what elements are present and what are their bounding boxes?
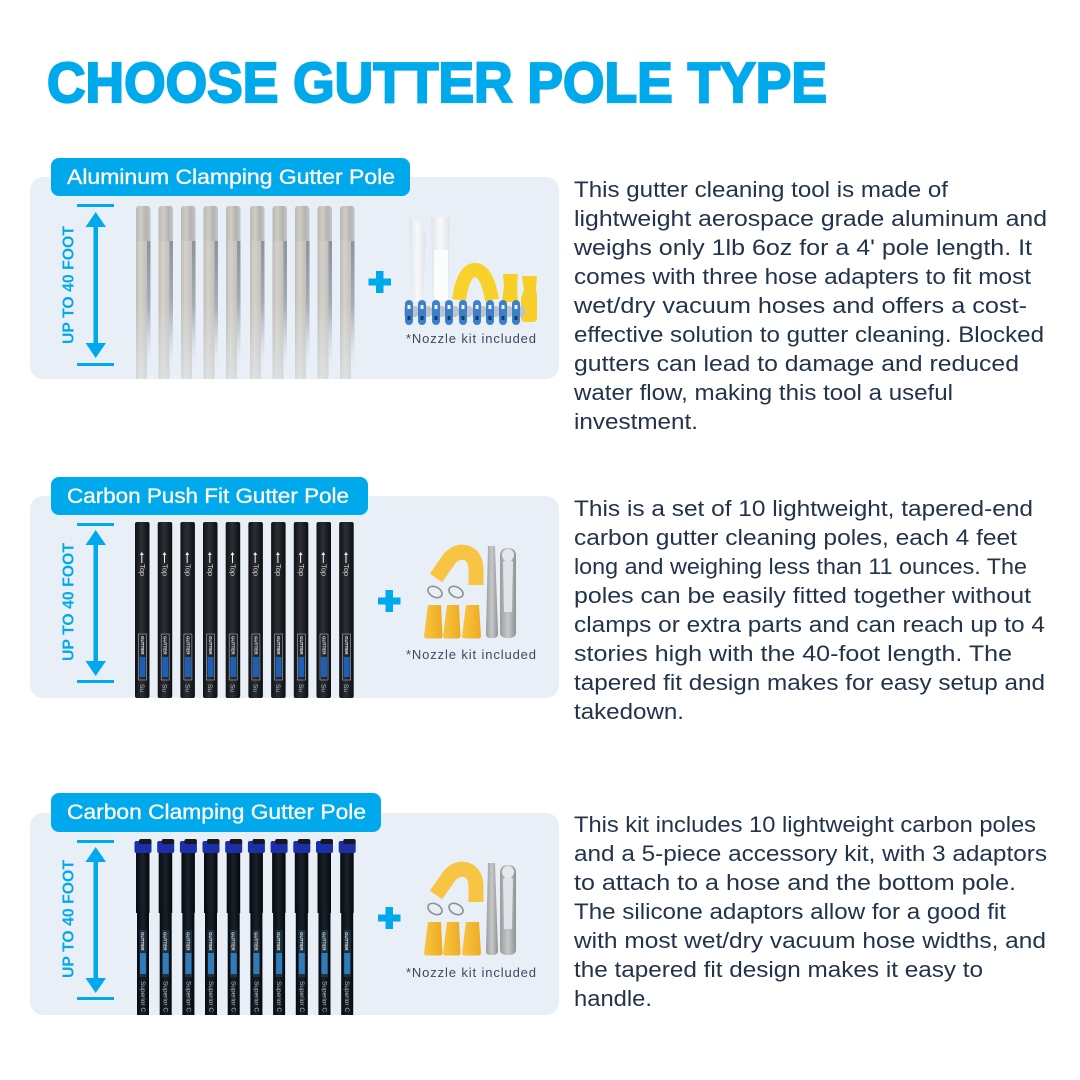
description: aluminum clamping gutter pole: lightweight aerospace grade aluminum and — [574, 206, 1047, 231]
description: carbon push fit gutter pole: This is a set of 10 lightweight, tapered-end — [574, 496, 1033, 521]
carbon push fit poles: GUTTER — [299, 636, 304, 655]
carbon clamping poles: Superior C — [320, 981, 328, 1012]
carbon clamping poles: GUTTER — [140, 932, 145, 951]
icon: plus — [378, 590, 400, 612]
description: carbon push fit gutter pole: clamps or extra parts and can reach up to 4 — [574, 612, 1045, 637]
carbon push fit poles: GUTTER — [208, 636, 213, 655]
carbon push fit poles: Su — [183, 684, 190, 692]
carbon clamping poles: Superior C — [184, 981, 191, 1012]
carbon push fit poles: Top — [161, 564, 170, 576]
height arrow: up to 40 foot — [60, 204, 114, 366]
description: aluminum clamping gutter pole: effective solution to gutter cleaning. Blocked — [574, 322, 1044, 347]
carbon push fit poles — [135, 522, 354, 698]
description: carbon push fit gutter pole: stories high with the 40-foot length. The — [574, 641, 1012, 666]
description: carbon clamping gutter pole — [573, 812, 1047, 1011]
description: carbon push fit gutter pole: tapered fit design makes for easy setup and — [574, 670, 1045, 695]
carbon clamping poles: GUTTER — [322, 932, 326, 951]
carbon push fit poles: Su — [342, 684, 349, 692]
carbon push fit poles: GUTTER — [231, 636, 236, 655]
aluminum poles — [136, 206, 354, 379]
carbon clamping poles: GUTTER — [185, 932, 190, 951]
description: carbon clamping gutter pole: handle. — [574, 986, 652, 1011]
height arrow: up to 40 foot: UP TO 40 FOOT — [60, 543, 78, 661]
carbon clamping poles: GUTTER — [208, 932, 213, 951]
description: aluminum clamping gutter pole: water flow, making this tool a useful — [573, 380, 953, 405]
carbon clamping poles: GUTTER — [231, 932, 236, 951]
description: carbon clamping gutter pole: the tapered fit design makes it easy to — [574, 957, 983, 982]
title: CHOOSE GUTTER POLE TYPE — [47, 51, 827, 115]
carbon clamping poles: GUTTER — [163, 932, 168, 951]
carbon clamping poles: Superior C — [162, 981, 169, 1012]
height arrow: up to 40 foot — [60, 840, 114, 1000]
carbon push fit poles: GUTTER — [140, 636, 145, 655]
carbon clamping poles — [134, 839, 356, 1015]
carbon push fit poles: Su — [251, 684, 258, 692]
carbon push fit poles: Top — [274, 564, 283, 576]
carbon clamping poles: Superior C — [230, 981, 237, 1012]
carbon clamping poles: Superior C — [207, 981, 214, 1012]
carbon push fit poles: GUTTER — [185, 636, 190, 655]
nozzle kit: yellow elbow, clamps, adaptors, grey nozzles — [424, 546, 516, 638]
description: carbon push fit gutter pole — [574, 496, 1045, 724]
note: nozzle kit included: *Nozzle kit included — [406, 331, 536, 346]
description: carbon clamping gutter pole: with most wet/dry vacuum hose widths, and — [573, 928, 1046, 953]
carbon push fit poles: Top — [206, 564, 215, 576]
carbon clamping poles: Superior C — [139, 981, 146, 1012]
note: nozzle kit included: *Nozzle kit included — [406, 647, 536, 662]
panel: aluminum clamping gutter pole — [30, 158, 559, 379]
carbon push fit poles: Top — [251, 564, 260, 576]
description: carbon clamping gutter pole: This kit includes 10 lightweight carbon poles — [574, 812, 1036, 837]
heading: carbon clamping gutter pole: Carbon Clamping Gutter Pole — [67, 800, 366, 824]
heading: aluminum clamping gutter pole — [51, 158, 410, 196]
description: aluminum clamping gutter pole: gutters can lead to damage and reduced — [574, 351, 1019, 376]
heading: aluminum clamping gutter pole: Aluminum Clamping Gutter Pole — [67, 165, 395, 189]
description: carbon push fit gutter pole: carbon gutter cleaning poles, each 4 feet — [574, 525, 1017, 550]
description: aluminum clamping gutter pole: comes with three hose adapters to fit most — [574, 264, 1031, 289]
icon: plus — [368, 271, 391, 293]
carbon clamping poles: Superior C — [343, 981, 350, 1012]
carbon clamping poles: Superior C — [275, 981, 282, 1012]
description: aluminum clamping gutter pole — [573, 177, 1047, 434]
carbon push fit poles: Top — [320, 564, 328, 576]
nozzle kit: yellow elbow, clamps, adaptors, grey nozzles — [424, 863, 516, 956]
carbon push fit poles: Top — [297, 564, 306, 576]
carbon push fit poles: Su — [206, 684, 213, 692]
carbon push fit poles: Su — [161, 684, 168, 692]
heading: carbon push fit gutter pole: Carbon Push Fit Gutter Pole — [67, 484, 349, 508]
nozzle kit: clear nozzles, yellow adaptors, clamps — [404, 217, 537, 325]
carbon push fit poles: GUTTER — [253, 636, 258, 655]
description: carbon push fit gutter pole: long and weighing less than 11 ounces. The — [574, 554, 1027, 579]
description: carbon clamping gutter pole: and a 5-piece accessory kit, with 3 adaptors — [574, 841, 1047, 866]
carbon push fit poles: GUTTER — [344, 636, 349, 655]
description: carbon clamping gutter pole: The silicone adaptors allow for a good fit — [574, 899, 1006, 924]
carbon push fit poles: Top — [138, 564, 147, 576]
carbon clamping poles: GUTTER — [276, 932, 281, 951]
description: carbon clamping gutter pole: to attach to a hose and the bottom pole. — [574, 870, 1016, 895]
description: aluminum clamping gutter pole: weighs only 1lb 6oz for a 4' pole length. It — [573, 235, 1032, 260]
panel: carbon push fit gutter pole — [30, 477, 559, 698]
description: aluminum clamping gutter pole: investment. — [574, 409, 698, 434]
carbon push fit poles: GUTTER — [163, 636, 168, 655]
heading: carbon clamping gutter pole — [51, 793, 381, 832]
carbon push fit poles: Top — [183, 564, 192, 576]
note: nozzle kit included: *Nozzle kit included — [406, 965, 536, 980]
description: carbon push fit gutter pole: poles can be easily fitted together without — [574, 583, 1031, 608]
description: aluminum clamping gutter pole: This gutter cleaning tool is made of — [574, 177, 949, 202]
carbon push fit poles: Su — [274, 684, 281, 692]
height arrow: up to 40 foot — [60, 523, 114, 683]
carbon push fit poles: GUTTER — [322, 636, 326, 655]
height arrow: up to 40 foot: UP TO 40 FOOT — [60, 860, 78, 978]
carbon push fit poles: Su — [138, 684, 145, 692]
description: aluminum clamping gutter pole: wet/dry vacuum hoses and offers a cost- — [573, 293, 1027, 318]
carbon push fit poles: GUTTER — [276, 636, 281, 655]
panel: carbon clamping gutter pole — [30, 793, 559, 1015]
carbon clamping poles: GUTTER — [253, 932, 258, 951]
carbon push fit poles: Su — [229, 684, 236, 692]
height arrow: up to 40 foot: UP TO 40 FOOT — [60, 226, 78, 344]
description: carbon push fit gutter pole: takedown. — [574, 699, 684, 724]
icon: plus — [378, 907, 400, 929]
carbon clamping poles: Superior C — [252, 981, 259, 1012]
carbon clamping poles: GUTTER — [344, 932, 349, 951]
carbon clamping poles: GUTTER — [299, 932, 304, 951]
carbon push fit poles: Top — [229, 564, 238, 576]
carbon push fit poles: Top — [342, 564, 351, 576]
heading: carbon push fit gutter pole — [51, 477, 368, 515]
carbon push fit poles: Su — [297, 684, 304, 692]
carbon push fit poles: Su — [320, 684, 326, 692]
carbon clamping poles: Superior C — [298, 981, 305, 1012]
